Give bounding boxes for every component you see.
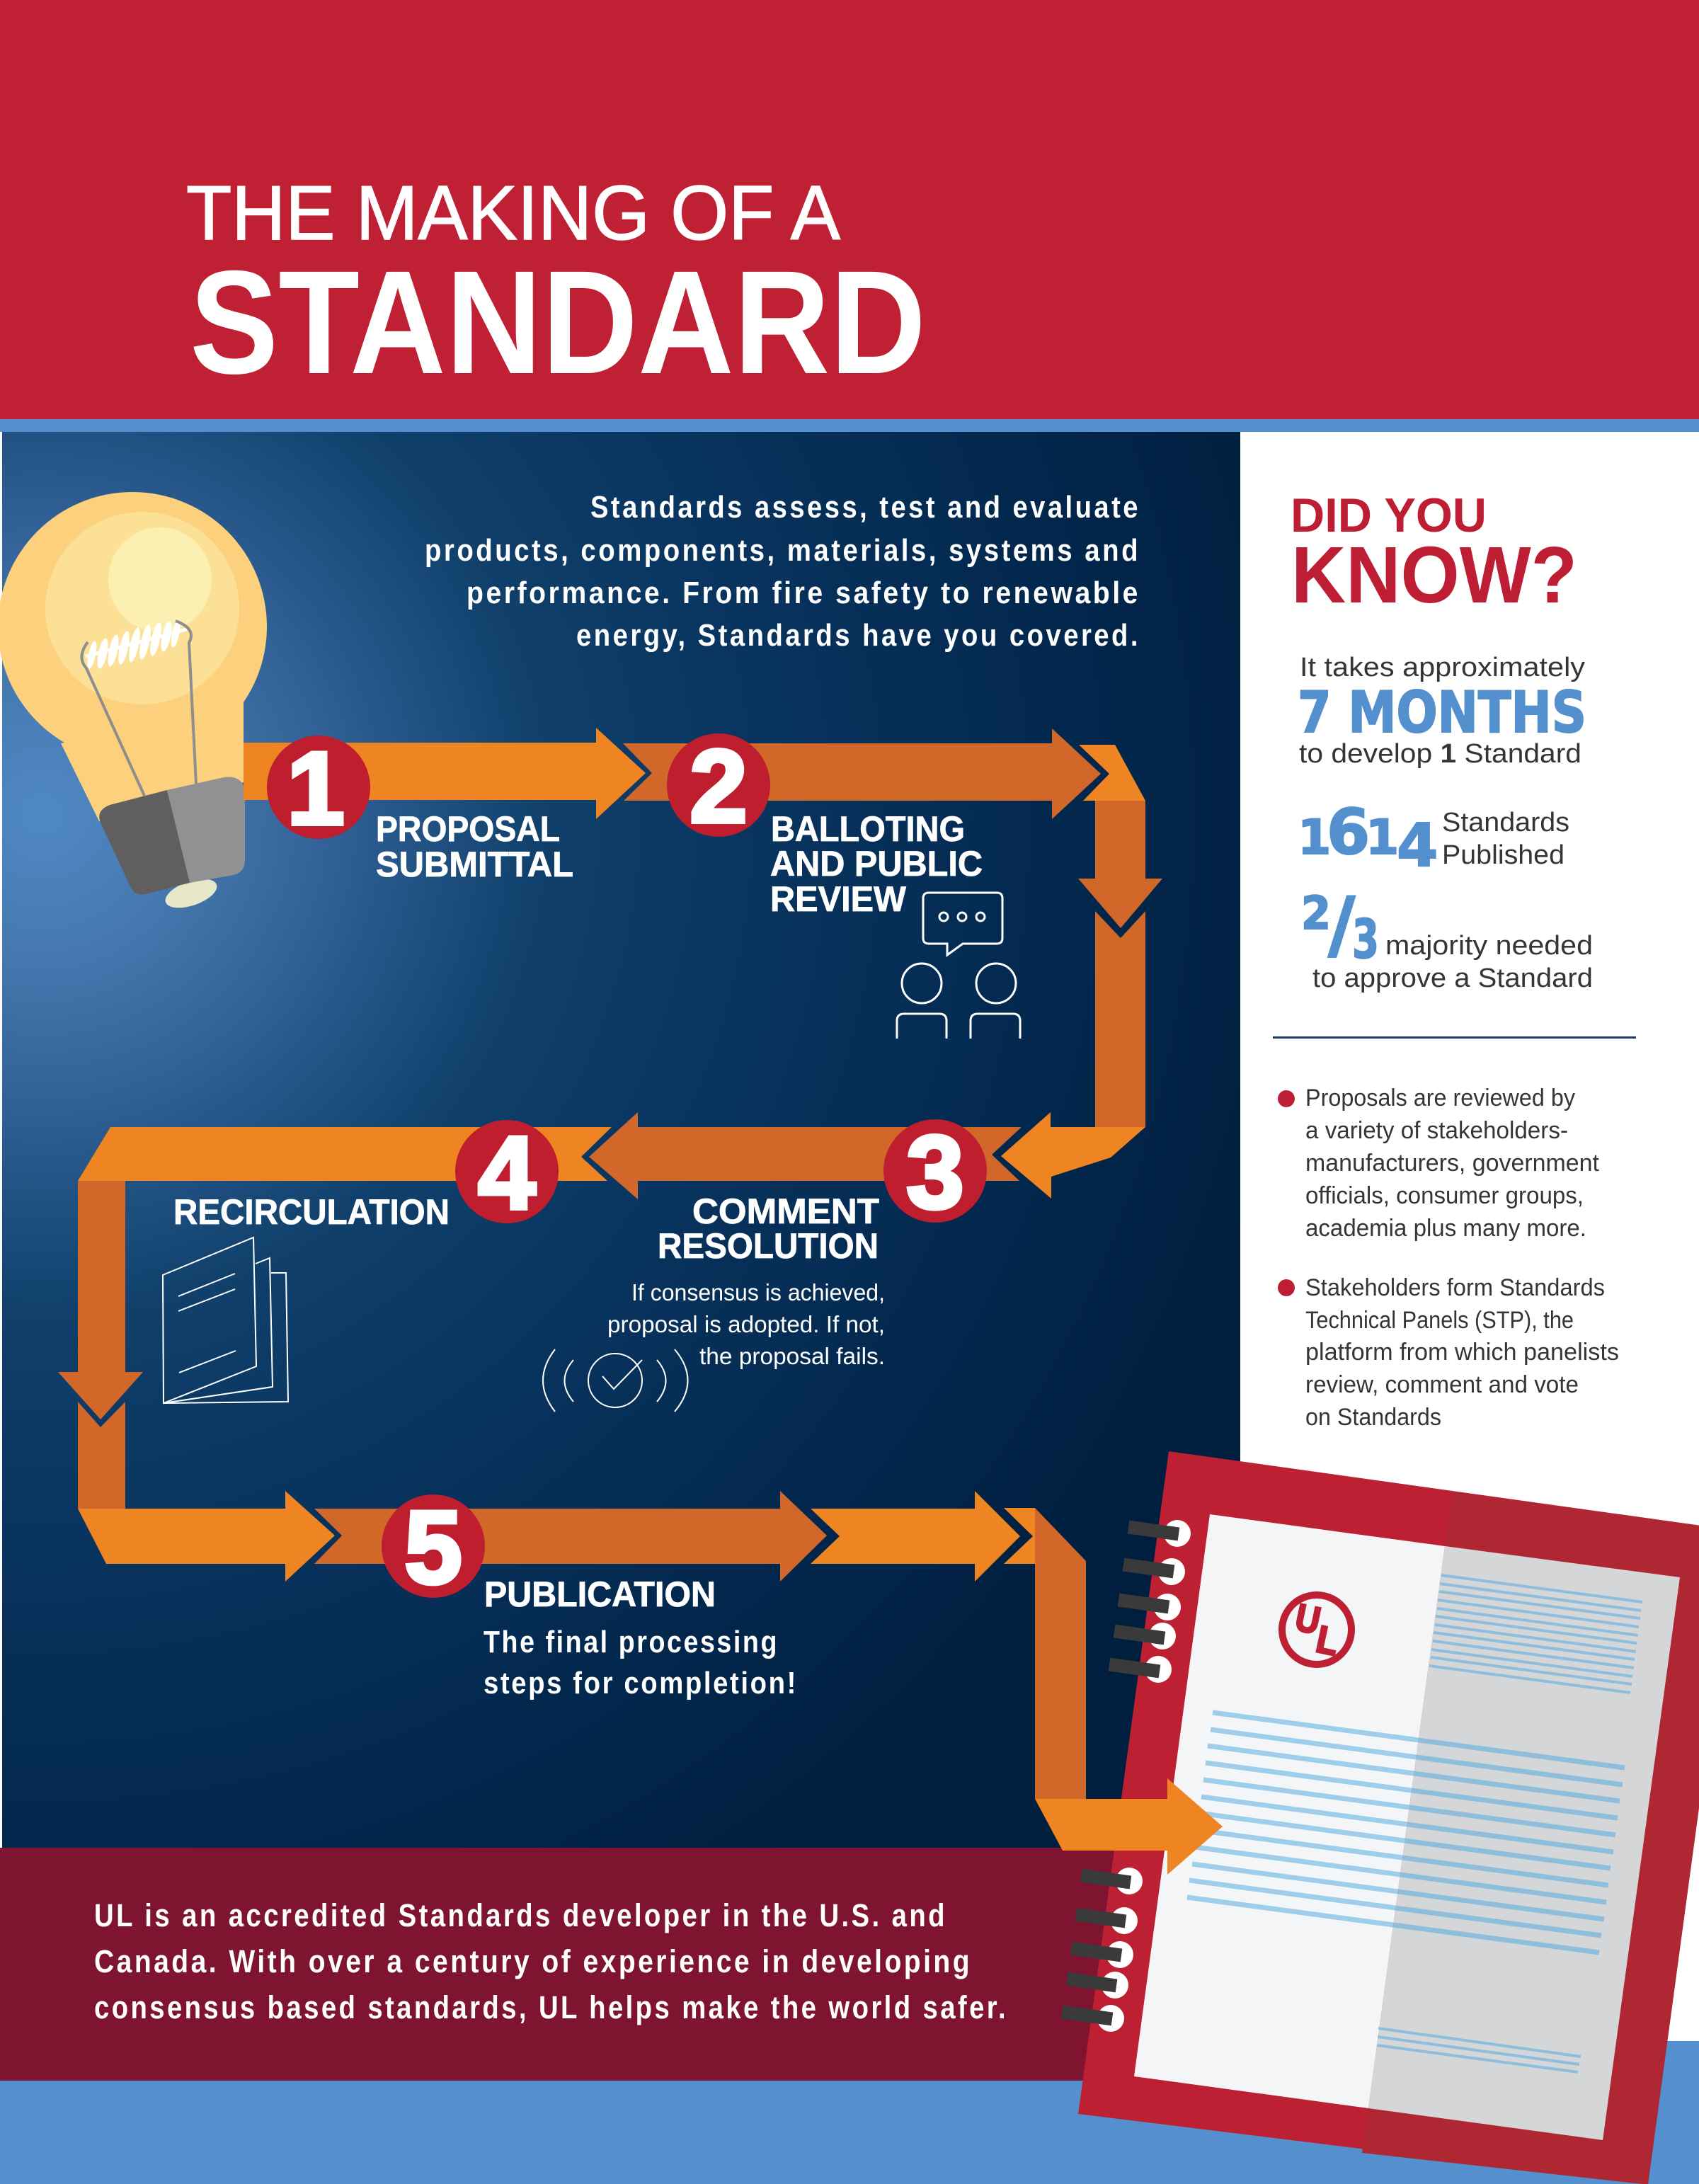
bullet two (1278, 1274, 1619, 1431)
footer text: UL is an accredited Standards developer in the U.S. and (94, 1897, 947, 1933)
step 3 label: COMMENT (692, 1191, 879, 1231)
footer text: consensus based standards, UL helps make the world safer. (94, 1989, 1008, 2025)
intro text: energy, Standards have you covered. (576, 618, 1140, 653)
step 3 label (658, 1191, 879, 1266)
bullet two: Stakeholders form Standards (1305, 1274, 1605, 1301)
step 1 label: PROPOSAL (376, 809, 560, 849)
stat: 1614 standards: 1 (1298, 810, 1331, 866)
step 3 description (607, 1279, 885, 1369)
step 2 badge (667, 728, 770, 844)
arrow: final into document (1035, 1778, 1223, 1875)
stat: 1614 standards: 6 (1327, 796, 1370, 869)
heading (1291, 488, 1577, 619)
step 2 label: AND PUBLIC (770, 844, 983, 884)
step 3 description: If consensus is achieved, (631, 1279, 885, 1305)
heading: DID YOU (1291, 488, 1487, 542)
stat: two thirds: majority needed (1385, 931, 1593, 961)
main text lines (1187, 1713, 1625, 1953)
bottom text lines (1377, 2028, 1581, 2072)
bullet two: on Standards (1305, 1404, 1441, 1431)
icon: approval check (543, 1349, 688, 1412)
stat: two thirds: / (1328, 881, 1356, 968)
panel: UL accredited developer (0, 1848, 1133, 2081)
title line two: STANDARD (190, 241, 926, 405)
panel: bottom blue band (0, 2041, 1699, 2184)
step 5 label: PUBLICATION (484, 1574, 716, 1614)
step 5 description (484, 1625, 798, 1700)
UL logo: L (1312, 1618, 1342, 1664)
top text lines (1429, 1575, 1642, 1693)
notebook page (1134, 1514, 1445, 2108)
stat: 1614 standards (1298, 796, 1569, 880)
step 5 description: steps for completion! (484, 1666, 798, 1700)
step 2 label: BALLOTING (771, 809, 965, 849)
step 4 label: RECIRCULATION (173, 1192, 450, 1232)
stat: 1614 standards: 1 (1366, 810, 1399, 866)
step 2 badge: 2 (690, 728, 748, 844)
intro text: performance. From fire safety to renewable (467, 576, 1140, 610)
step 5 badge (382, 1490, 485, 1605)
stat: 1614 standards: Standards (1442, 808, 1569, 837)
step 3 badge: 3 (906, 1114, 964, 1230)
intro text: products, components, materials, systems and (425, 533, 1140, 568)
title (186, 170, 926, 405)
arrow path: process flow (58, 728, 1162, 1799)
stat: seven months: 7 MONTHS (1298, 680, 1586, 745)
footer text: Canada. With over a century of experience in developing (94, 1943, 972, 1979)
step 1 badge (267, 731, 370, 846)
step 2 label (770, 809, 983, 919)
intro text: Standards assess, test and evaluate (590, 490, 1140, 525)
notebook cover (1078, 1451, 1699, 2184)
stat: seven months (1298, 653, 1586, 769)
UL logo (1282, 1595, 1351, 1664)
step 3 label: RESOLUTION (658, 1226, 879, 1266)
step 1 label (376, 809, 573, 884)
heading: KNOW? (1291, 530, 1577, 619)
spiral rings (1062, 1520, 1191, 2032)
intro text (425, 490, 1140, 653)
icon: two people talking (897, 893, 1020, 1039)
stat: two thirds: 2 (1301, 888, 1331, 940)
stat: seven months: to develop 1 Standard (1299, 739, 1581, 769)
bullet one: academia plus many more. (1305, 1215, 1586, 1242)
bullet one: Proposals are reviewed by (1305, 1085, 1575, 1111)
UL logo: U (1292, 1596, 1324, 1642)
stat: two thirds: to approve a Standard (1312, 964, 1593, 993)
step 3 description: proposal is adopted. If not, (607, 1311, 885, 1337)
stat: 1614 standards: 4 (1397, 811, 1438, 880)
step 3 description: the proposal fails. (699, 1343, 885, 1369)
footer text (94, 1897, 1008, 2025)
panel: process background (2, 432, 1240, 1849)
stat: two thirds: 3 (1352, 908, 1379, 971)
bullet one (1278, 1085, 1600, 1242)
header band (0, 0, 1699, 432)
step 1 label: SUBMITTAL (376, 845, 573, 884)
bullet one: officials, consumer groups, (1305, 1182, 1584, 1209)
stat: two thirds (1301, 881, 1593, 993)
bullet one: manufacturers, government (1305, 1150, 1600, 1177)
step 5 description: The final processing (484, 1625, 779, 1659)
panel: did you know (1273, 488, 1636, 1431)
icon: light bulb (0, 492, 267, 913)
bullet two: Technical Panels (STP), the (1305, 1307, 1574, 1334)
stat: seven months: It takes approximately (1300, 653, 1585, 682)
step 2 label: REVIEW (770, 879, 907, 919)
step 4 badge: 4 (478, 1115, 536, 1230)
step 3 badge (883, 1114, 987, 1230)
title line one: THE MAKING OF A (186, 170, 840, 256)
icon: documents (163, 1237, 288, 1403)
bullet two: platform from which panelists (1305, 1339, 1619, 1366)
step 4 badge (455, 1115, 559, 1230)
stat: 1614 standards: Published (1442, 840, 1564, 870)
bullet two: review, comment and vote (1305, 1371, 1579, 1398)
step 1 badge: 1 (287, 731, 345, 846)
bullet one: a variety of stakeholders- (1305, 1117, 1568, 1144)
notebook (1062, 1451, 1699, 2184)
step 5 badge: 5 (404, 1490, 462, 1605)
